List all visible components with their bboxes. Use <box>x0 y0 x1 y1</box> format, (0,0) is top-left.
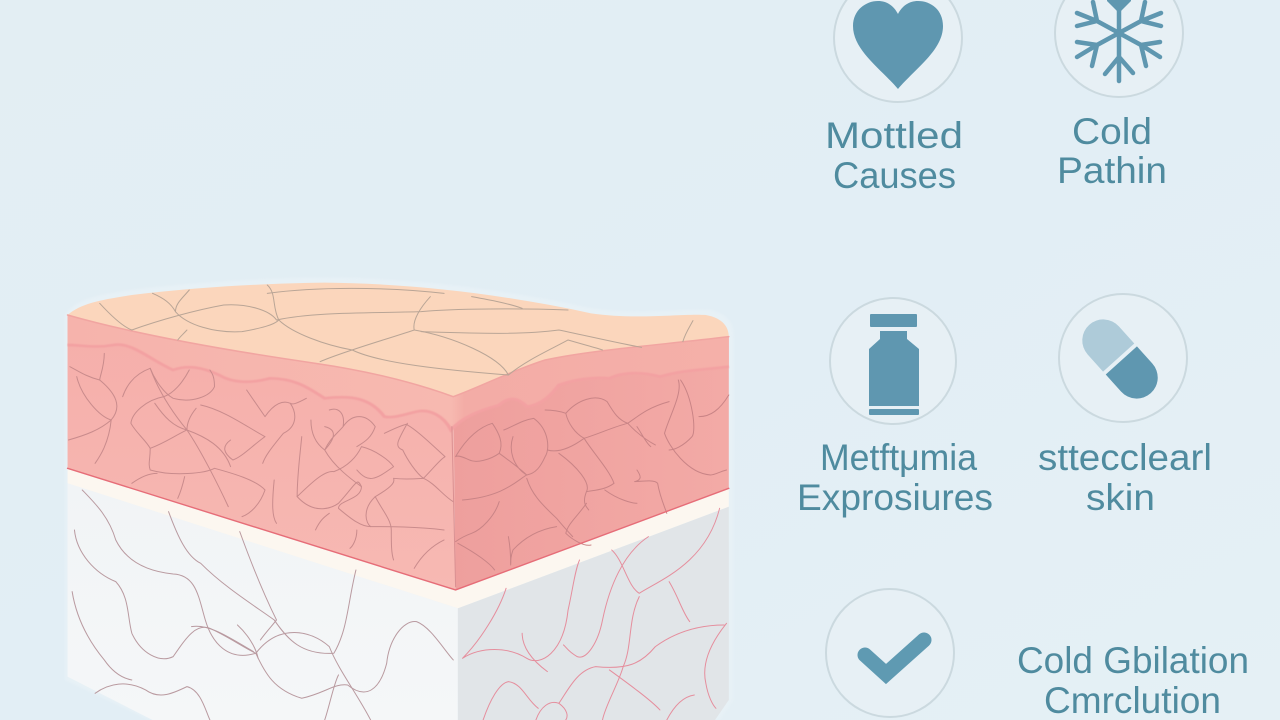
cause item: mottled causes <box>825 0 963 196</box>
subcutaneous layer: right face <box>458 507 729 720</box>
label: medication exposures <box>797 437 993 518</box>
dermis: left face <box>68 315 456 590</box>
cause item: cold circulation <box>826 589 1249 720</box>
subcutaneous layer: left face <box>68 483 458 720</box>
top rim line <box>68 315 729 397</box>
label: stressed skin: sttecclearl <box>1038 437 1212 478</box>
dermis cracks: right face <box>456 380 729 570</box>
label: mottled causes <box>825 115 963 196</box>
label: stressed skin <box>1038 437 1212 518</box>
label: cold pathin <box>1057 111 1167 191</box>
vessels: grey right face <box>462 508 727 720</box>
skin block halo <box>65 278 733 720</box>
icon: heart in ring <box>834 0 962 102</box>
surface cracks <box>100 285 693 375</box>
label: cold pathin: Pathin <box>1057 150 1167 191</box>
dermis cracks: left face <box>68 353 453 568</box>
skin surface top face <box>68 283 729 397</box>
epidermis upper band <box>68 315 729 430</box>
skin cross-section illustration <box>65 278 733 720</box>
label: mottled causes: Mottled <box>825 115 963 156</box>
label: medication exposures: Exprosiures <box>797 477 993 518</box>
icon: snowflake in ring <box>1055 0 1183 97</box>
cause item: medication exposures <box>797 298 993 518</box>
cause item: stressed skin <box>1038 294 1212 518</box>
cause item: cold pathin <box>1055 0 1183 191</box>
icon: check mark in ring <box>826 589 954 717</box>
icon: capsule in ring <box>1059 294 1187 422</box>
label: cold circulation: Cmrclution <box>1044 680 1221 720</box>
icon: medicine bottle in ring <box>830 298 956 424</box>
label: medication exposures: Metftμmia <box>820 437 977 478</box>
vertical corner line <box>452 427 456 587</box>
label: cold pathin: Cold <box>1072 111 1152 152</box>
epidermis wave line <box>68 345 729 430</box>
pink lower edge line <box>68 468 729 590</box>
label: stressed skin: skin <box>1086 477 1155 518</box>
label: mottled causes: Causes <box>833 155 956 196</box>
vessels: white left face <box>72 490 453 720</box>
label: cold circulation: Cold Gbilation <box>1017 640 1249 681</box>
dermis: right face <box>453 337 729 590</box>
label: cold circulation <box>1017 640 1249 720</box>
white membrane band <box>68 468 729 608</box>
